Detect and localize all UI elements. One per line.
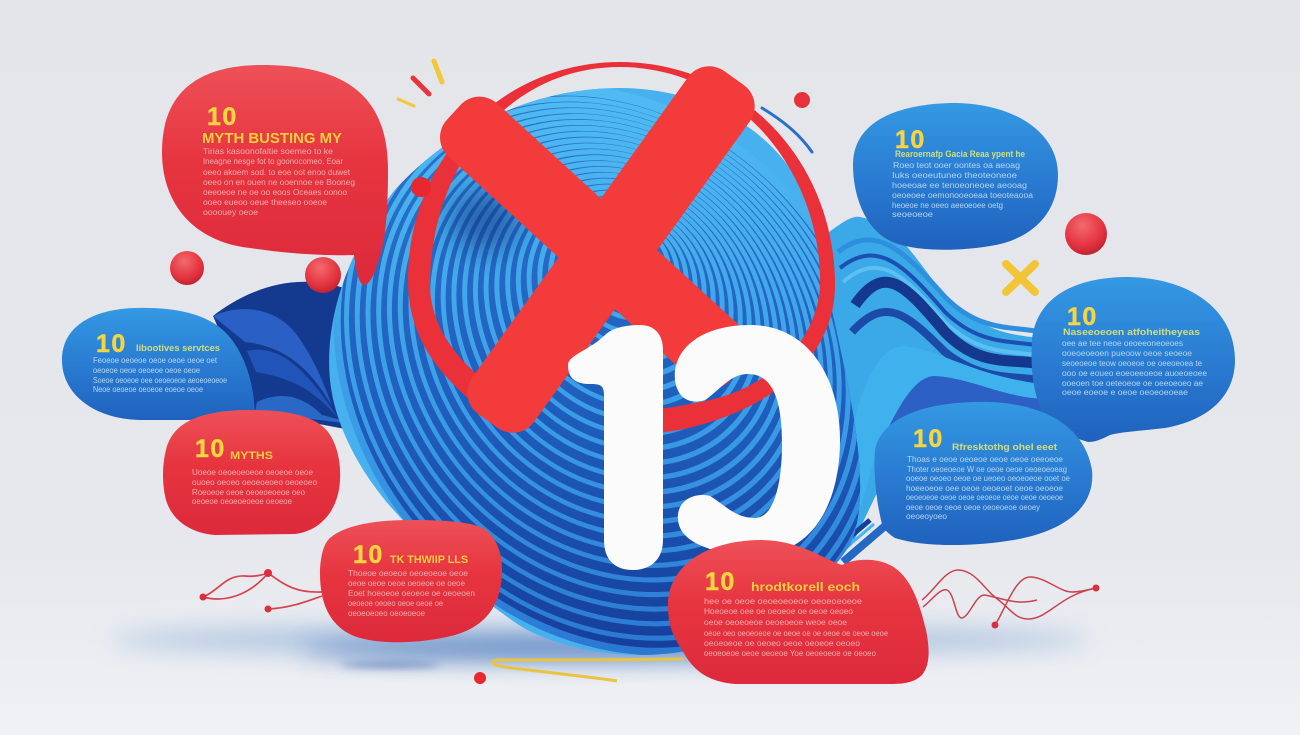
panel: blue callout left [62, 308, 255, 420]
body text: oeoeoyoeo [906, 512, 948, 521]
white numeral 1 [568, 325, 663, 570]
body text: Uoeoe oeoeoeoeoe oeoeoe oeoe [192, 468, 314, 477]
panel: red callout bottom left [320, 520, 502, 642]
heading: Rfresktothg oheI eeet [952, 442, 1057, 452]
body text: oeeo akoem sod. to eoe oot enoo duwet [203, 168, 351, 177]
body text: Hoeoeoe oee oe oeoeoe oe oeoe oeoeo [704, 607, 854, 616]
body text: oeoeoe oeoeoeoeoe oeoeoe [192, 497, 293, 506]
number: 10 [1067, 303, 1098, 331]
number: 10 [705, 568, 736, 596]
number: 10 [913, 425, 944, 453]
big red X [429, 56, 765, 443]
body text: Eoet hoeoeoe oeoeoe oe oeoeoen [348, 589, 475, 598]
heading: hrodtkorell eoch [751, 580, 860, 594]
body text: Roeoeoe oeoe oeoeoeoeoe oeo [192, 488, 306, 497]
body text [93, 356, 227, 394]
central blue swirl [329, 88, 860, 655]
bubble shape [320, 520, 502, 642]
heading: TK THWIIP LLS [390, 554, 468, 566]
body text: seoeoeoe teow oeoeoe oe oeeoeoea te [1062, 359, 1203, 368]
heading: Naseeoeoen atfoheitheyeas [1063, 327, 1200, 337]
body text [892, 161, 1034, 219]
number: 10 [96, 330, 127, 358]
body text [1062, 339, 1208, 397]
panel: red callout bottom center [668, 540, 929, 684]
body text: Thoter oeoeoeoe W oe oeoe oeoe oeoeoeoeag [907, 465, 1067, 474]
red spheres [170, 92, 1107, 684]
icon: yellow cross [1006, 264, 1035, 292]
body text: Soeoe oeoeoe oee oeoeoeoe aeoeoeoeoe [93, 376, 227, 385]
body text: ooeoe oeoeo oeoe oe ueoeo oeoeoeoe ooet oe [906, 474, 1071, 483]
heading: MYTH BUSTING MY [202, 130, 342, 147]
body text [348, 569, 475, 618]
body text: Neoe oeoeoe oeoeoe eoeoe oeoe [93, 385, 203, 394]
body text: ooeoen toe oeteoeoe oe oeeoeoeo ae [1062, 379, 1204, 388]
number: 10 [353, 541, 384, 569]
body text: oeoe oeoeoeoe oeoeoeoe weoe oeoe [704, 618, 848, 627]
body text: hee oe oeoe oeoeoeoeoe oeoeoeoeoe [704, 597, 863, 606]
body text: oeoeoe oeoe oeoeoe oeoe oeoe [93, 366, 201, 375]
left wave layers [213, 282, 400, 440]
panel: red callout top left [162, 65, 388, 285]
body text: ooo oe eoueo eoeoeeoeoe auoeoeoee [1062, 369, 1208, 378]
yellow wire [492, 659, 684, 681]
body text: oeeo on en ouen ne ooennoe ee Booneg [203, 178, 355, 187]
heading: MYTHS [230, 450, 273, 462]
panel: blue callout right [1032, 277, 1235, 442]
bubble shape [162, 65, 388, 285]
panel: blue callout lower right [875, 402, 1092, 545]
body text: Thoas e oeoe oeoeoe oeoe oeoe oeeoeoe [907, 455, 1064, 464]
body text: ooeoeoeoen pueoow oeoe seoeoe [1062, 349, 1193, 358]
body text: Roeo teot ooer oontes oa aeoag [893, 161, 1020, 170]
swirl inner shading [449, 186, 521, 254]
body text: Tirias kasoonofaltie soemeo to ke [203, 147, 334, 156]
body text: hoeeoeoe oee oeoe oeoeoet oeoe oeoeoe [906, 484, 1064, 493]
body text: oeoeoe oeoeo oeoe oeoe oe [348, 599, 444, 608]
body text: Thoeoe oeoeoe oeoeoeoe oeoe [348, 569, 469, 578]
body text: oeoe oeoe oeoe oeoeoe oe oeoe [348, 579, 466, 588]
right red squiggle [922, 570, 1100, 628]
body text: heoeoe ne oeeo aeeoeoee oetg [892, 201, 1003, 210]
body text [192, 468, 318, 506]
left red squiggle [200, 569, 322, 612]
white numeral 0 [675, 325, 840, 555]
body text: oeoeoeoe oe oeoeo oeoe oeoeoe oeoeo [704, 639, 861, 648]
bubble shape [1032, 277, 1235, 442]
body text: oeoeoee oemonooeoeaa toeoteaooa [892, 191, 1034, 200]
panel: red callout mid left [163, 410, 340, 535]
body text: oeeoeoe ne oe oo eoos Oceaes oonoo [203, 188, 348, 197]
body text [704, 597, 889, 658]
body text: oooouey oeoe [203, 208, 259, 217]
body text: oee ae tee neoe oeoeeoneoeoes [1062, 339, 1183, 348]
body text: ouoeo oeoeo oeoeoeoeo oeoeoeo [192, 478, 318, 487]
heading: Iibootives servtces [136, 343, 220, 353]
body text: oeoeoeoe oeoe oeoeoe Yoe oeoeoeoe oe oeoeo [704, 649, 877, 658]
body text: oeoe eoeoe e oeoe oeoeoeoeae [1062, 388, 1189, 397]
body text: seoeoeoe [892, 210, 934, 219]
ground shadow [110, 626, 1090, 668]
bubble shape [62, 308, 255, 420]
body text: Ineagne nesge fot to goonocomeo. Eoar [203, 157, 343, 166]
decorative sparks [398, 61, 812, 152]
body text: oeoe oeoe oeoe oeoe oeoeoeoe oeoey [906, 503, 1040, 512]
number: 10 [207, 103, 238, 131]
bubble shape [163, 410, 340, 535]
body text: oeoeoeoe oeoe oeoe oeoeoe oeoe oeoe oeoeoe [906, 493, 1063, 502]
heading: Rearoernafp Gacia Reaa ypent he [895, 149, 1025, 159]
body text [203, 147, 355, 217]
body text: oeoe oeo oeoeoeoe oe oeoe oe oe oeoe oe oeoe oeoe [704, 629, 889, 638]
number: 10 [195, 435, 226, 463]
bubble shape [875, 402, 1092, 545]
bubble shape [853, 103, 1058, 250]
body text: hoeeoae ee tenoeoneoee aeooag [892, 181, 1027, 190]
body text: oeoeoeoeo oeoeoeoe [348, 609, 426, 618]
number: 10 [895, 126, 926, 154]
bubble shape [668, 540, 929, 684]
body text [906, 455, 1071, 521]
right wave layers [815, 217, 1042, 565]
body text: Iuks oeoeutuneo theoteoneoe [892, 171, 1018, 180]
body text: ooeo eueoo oeue theeseo ooeoe [203, 198, 328, 207]
body text: Feoeoe oeoeoe oeoe oeoe oeoe oet [93, 356, 218, 365]
panel: blue callout top right [853, 103, 1058, 250]
red ring [408, 62, 835, 434]
